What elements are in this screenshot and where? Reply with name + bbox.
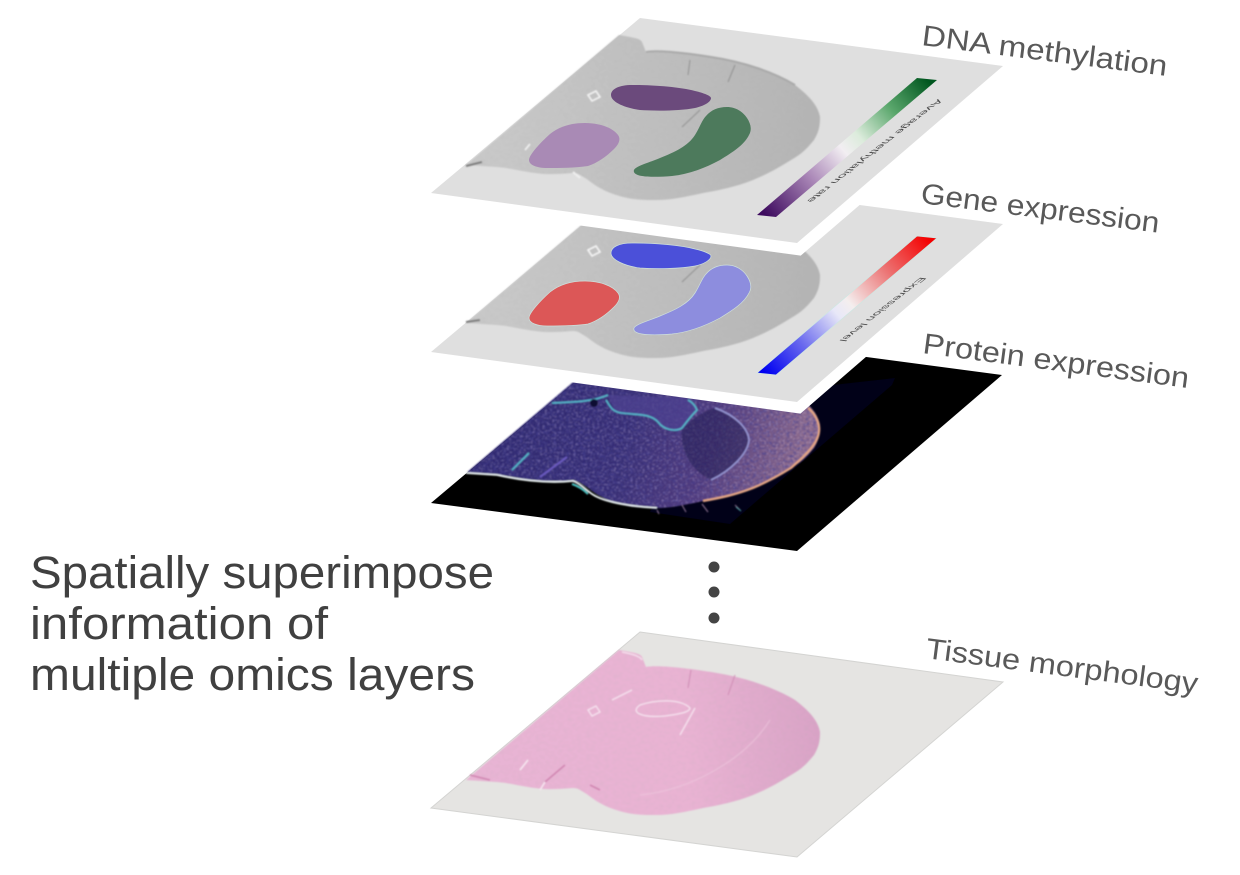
- heading text block: [30, 547, 494, 700]
- upper lobe: [608, 395, 697, 430]
- methylation region: curved green: [634, 107, 751, 177]
- rim highlight: [703, 408, 819, 501]
- ticks under the section: [657, 504, 740, 514]
- expression region: curved blue: [634, 265, 751, 335]
- heading text block: information of: [30, 598, 329, 649]
- expression region: striatum top: [611, 243, 711, 269]
- label: Tissue morphology: Tissue morphology: [924, 633, 1200, 700]
- dim navy image area: [650, 378, 895, 524]
- expression region: red lobe: [529, 281, 619, 326]
- plane: gene expression: [431, 176, 1003, 402]
- label: Gene expression: Gene expression: [919, 178, 1161, 240]
- vessels and outlines: [512, 395, 697, 470]
- inner region: [682, 408, 749, 480]
- heading text block: multiple omics layers: [30, 649, 475, 700]
- heading text block: Spatially superimpose: [30, 547, 494, 598]
- brain section: gray: [460, 30, 830, 205]
- colour bar: expression level: [757, 236, 937, 375]
- panel: tissue morphology layer: [431, 632, 1003, 857]
- plane: DNA methylation: [431, 18, 1003, 243]
- methylation region: light purple lobe: [529, 123, 619, 168]
- panel: gene expression layer: [431, 176, 1003, 402]
- label: DNA methylation: DNA methylation: [920, 20, 1169, 83]
- brain section: gray: [465, 226, 820, 358]
- ellipsis dots: [708, 562, 720, 624]
- panel: protein expression layer: [431, 356, 1002, 551]
- colour bar label: Average methylation rate: [803, 99, 946, 203]
- speckle texture: [468, 382, 818, 508]
- plane: tissue morphology: [431, 632, 1003, 857]
- colour bar: average methylation rate: [757, 78, 937, 217]
- brain section: fluorescence: [465, 382, 822, 515]
- brain section: pink stain: [460, 645, 830, 820]
- colour bar label: Expression level: [836, 277, 929, 342]
- methylation region: striatum top: [611, 85, 711, 111]
- panel: DNA methylation layer: [431, 18, 1003, 243]
- label: Protein expression: Protein expression: [921, 328, 1191, 395]
- plane: protein expression black: [431, 327, 1002, 551]
